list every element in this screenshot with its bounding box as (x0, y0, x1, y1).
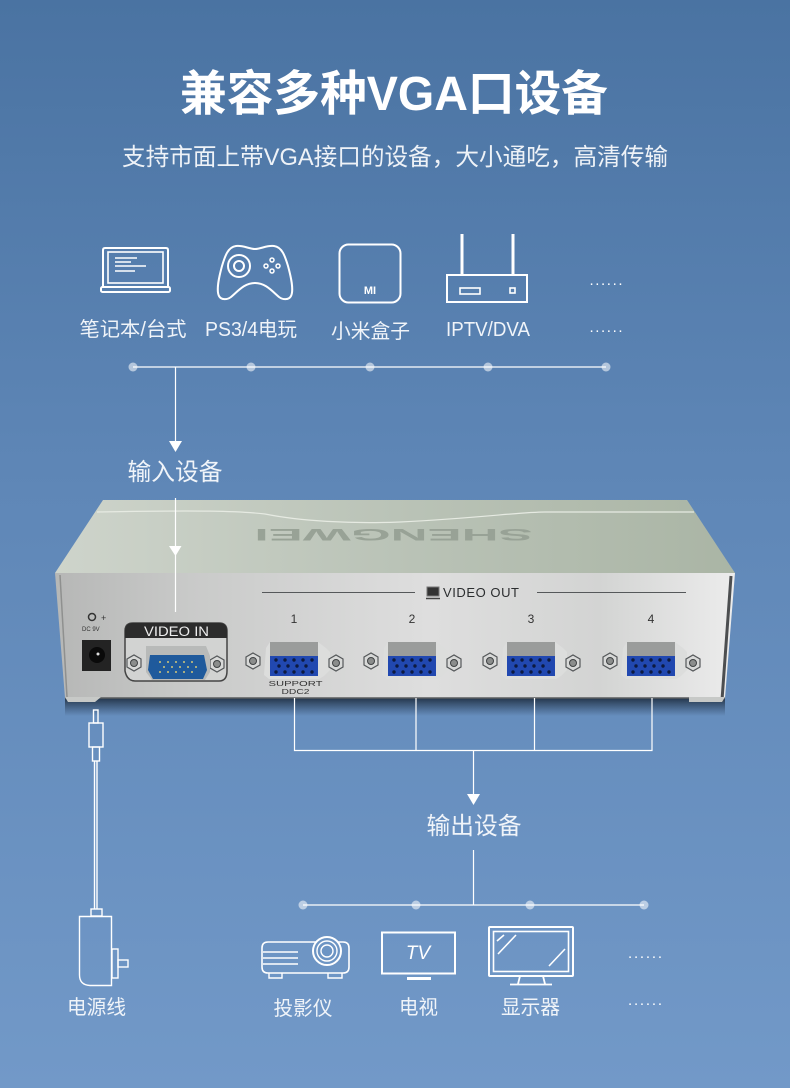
device shadow (65, 698, 725, 716)
ellipsis: ...... (628, 992, 662, 1009)
icon: TV: TV (406, 943, 432, 964)
port numbers: 3 (528, 612, 535, 626)
output label: 输出设备 (426, 813, 522, 840)
video in port (125, 623, 227, 681)
arrow down to input label (169, 367, 182, 452)
power port: DC 9V (82, 627, 100, 633)
ellipsis: ...... (590, 319, 622, 336)
input device labels: PS3/4电玩 (205, 318, 297, 341)
right foot (689, 697, 725, 702)
output dot connector line (298, 850, 648, 910)
video out header: VIDEO OUT (443, 585, 519, 600)
arrow into video in (169, 498, 182, 612)
device front face (55, 573, 735, 698)
device: VGA splitter (55, 500, 735, 716)
icon: projector (262, 937, 349, 978)
input device labels: 小米盒子 (331, 320, 410, 343)
arrow to output label (467, 794, 480, 805)
output device labels: 显示器 (501, 997, 560, 1019)
port numbers: 4 (648, 612, 655, 626)
power port: + (101, 613, 106, 623)
power port (82, 613, 111, 671)
device top face (55, 500, 735, 573)
ellipsis: ...... (628, 945, 662, 962)
output device labels: 投影仪 (274, 997, 332, 1020)
output ports (246, 642, 700, 679)
video out header (262, 585, 686, 600)
input device labels (80, 318, 531, 343)
output device labels: 电视 (399, 996, 438, 1019)
icon: monitor (489, 927, 573, 984)
left foot (65, 697, 101, 702)
input device labels: IPTV/DVA (446, 319, 531, 341)
brand logo: SHENGWEI (254, 525, 532, 544)
subtitle: 支持市面上带VGA接口的设备，大小通吃，高清传输 (122, 144, 668, 171)
input device labels: 笔记本/台式 (80, 318, 186, 341)
title: 兼容多种VGA口设备 (180, 68, 608, 121)
icon: game controller (218, 246, 292, 299)
ellipsis: ...... (590, 272, 622, 289)
input label: 输入设备 (128, 459, 222, 486)
ddc label: DDC2 (282, 689, 310, 696)
icon: mi box: MI (364, 285, 376, 297)
video in port: VIDEO IN (144, 624, 209, 639)
icon: router (447, 234, 527, 302)
output device labels (274, 996, 560, 1020)
input dot connector line (128, 362, 610, 372)
support label: SUPPORT (268, 679, 323, 688)
icon: laptop (101, 248, 170, 292)
port numbers (291, 612, 655, 626)
power label: 电源线 (67, 996, 126, 1019)
icon: mi box (340, 244, 400, 302)
port numbers: 1 (291, 612, 298, 626)
icon: TV (382, 932, 455, 978)
port numbers: 2 (409, 612, 416, 626)
icon: power cable and adapter (80, 710, 128, 986)
output bracket lines (294, 698, 652, 794)
